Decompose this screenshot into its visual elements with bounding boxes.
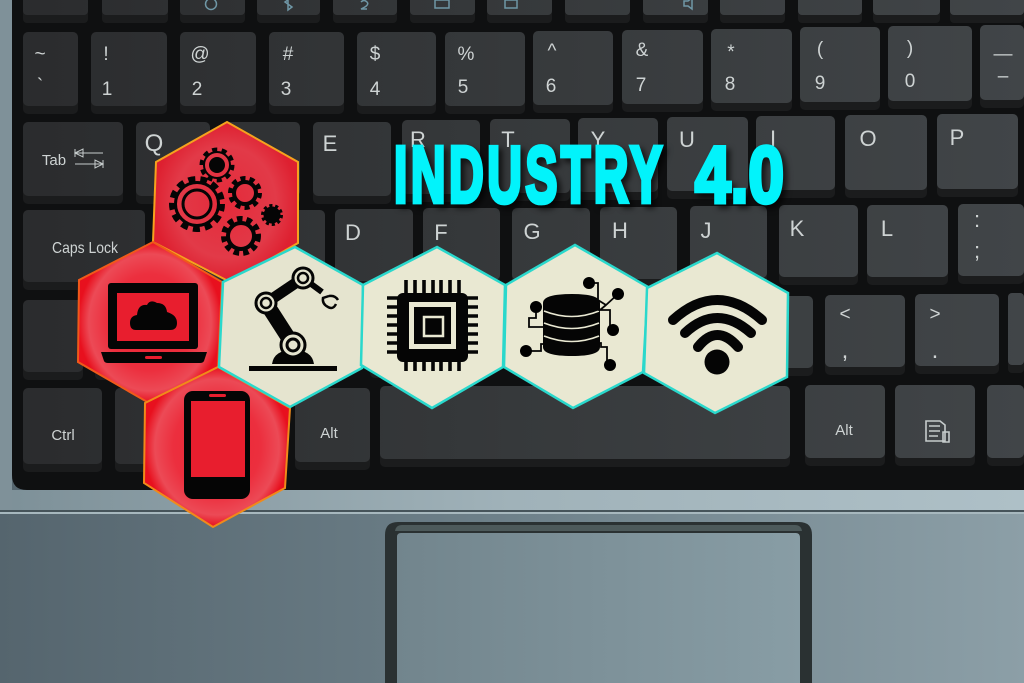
key legends: % (458, 44, 475, 65)
hexagon: database (504, 245, 648, 408)
hexagon: smartphone (144, 367, 290, 527)
icon: database network (520, 277, 624, 371)
key legends: J (700, 218, 712, 243)
keyboard keys (23, 0, 1024, 464)
key legends: , (842, 337, 848, 364)
key legends: & (636, 40, 649, 61)
title (394, 129, 784, 220)
key legends: H (612, 218, 628, 243)
key legends: I (770, 126, 776, 151)
key legends: Caps Lock (52, 240, 119, 257)
icon: smartphone (184, 391, 250, 499)
key legends: Alt (320, 425, 339, 442)
key legends: F (434, 220, 448, 245)
key legends: P (950, 125, 964, 150)
key legends: K (790, 216, 805, 241)
key legends: 5 (458, 77, 468, 98)
key legends: ( (817, 39, 824, 60)
keyboard well (12, 0, 1024, 490)
icon: laptop (101, 283, 207, 363)
key legends: G (523, 219, 541, 244)
key legends: Alt (835, 422, 854, 439)
key legends: . (932, 337, 938, 364)
key legends: 0 (905, 71, 915, 92)
key legends: 1 (102, 79, 112, 100)
key legends: 2 (192, 79, 202, 100)
hexagon: laptop cloud (78, 242, 222, 403)
key legends: T (501, 127, 515, 152)
key legends: R (410, 127, 426, 152)
hexagon: gears (153, 122, 298, 282)
key legends: — (994, 44, 1012, 65)
key legends: O (859, 126, 877, 151)
key legends: # (283, 44, 294, 65)
key legends: E (323, 131, 337, 156)
key legends: ` (37, 76, 43, 97)
key legends: Tab (42, 152, 66, 169)
icon: robot arm (249, 268, 338, 371)
key legends: : (974, 207, 980, 232)
hexagon: robot arm (219, 247, 363, 407)
key legends: 8 (725, 74, 735, 95)
key legends (34, 38, 1012, 444)
function key icons (206, 0, 692, 10)
key legends: L (881, 216, 893, 241)
hexagon: microchip (361, 247, 505, 408)
key legends: Y (591, 127, 606, 152)
key legends: ; (974, 238, 980, 263)
touchpad (385, 522, 812, 683)
key legends: D (345, 220, 361, 245)
title: INDUSTRY (394, 129, 662, 219)
icon: microchip (387, 280, 478, 371)
key legends: $ (370, 44, 381, 65)
key legends: ^ (548, 41, 557, 62)
key legends: U (679, 127, 695, 152)
key legends: > (929, 304, 941, 325)
key legends: @ (190, 44, 210, 65)
key legends: ) (907, 38, 913, 59)
key legends: Ctrl (51, 427, 75, 444)
key legends: ! (103, 44, 109, 65)
key legends: – (998, 66, 1009, 87)
icon: wifi (673, 300, 762, 374)
key legends: 7 (636, 75, 646, 96)
icon: gears (172, 150, 281, 253)
key legends: 6 (546, 76, 556, 97)
key legends: 4 (370, 79, 381, 100)
title: 4.0 (695, 130, 784, 220)
key legends: 3 (281, 79, 291, 100)
key legends: 9 (815, 73, 825, 94)
key legends: Q (145, 130, 163, 157)
key legends: * (727, 42, 735, 63)
key legends: ~ (34, 44, 46, 65)
key legends: < (839, 304, 851, 325)
hexagon: wifi (644, 253, 788, 413)
